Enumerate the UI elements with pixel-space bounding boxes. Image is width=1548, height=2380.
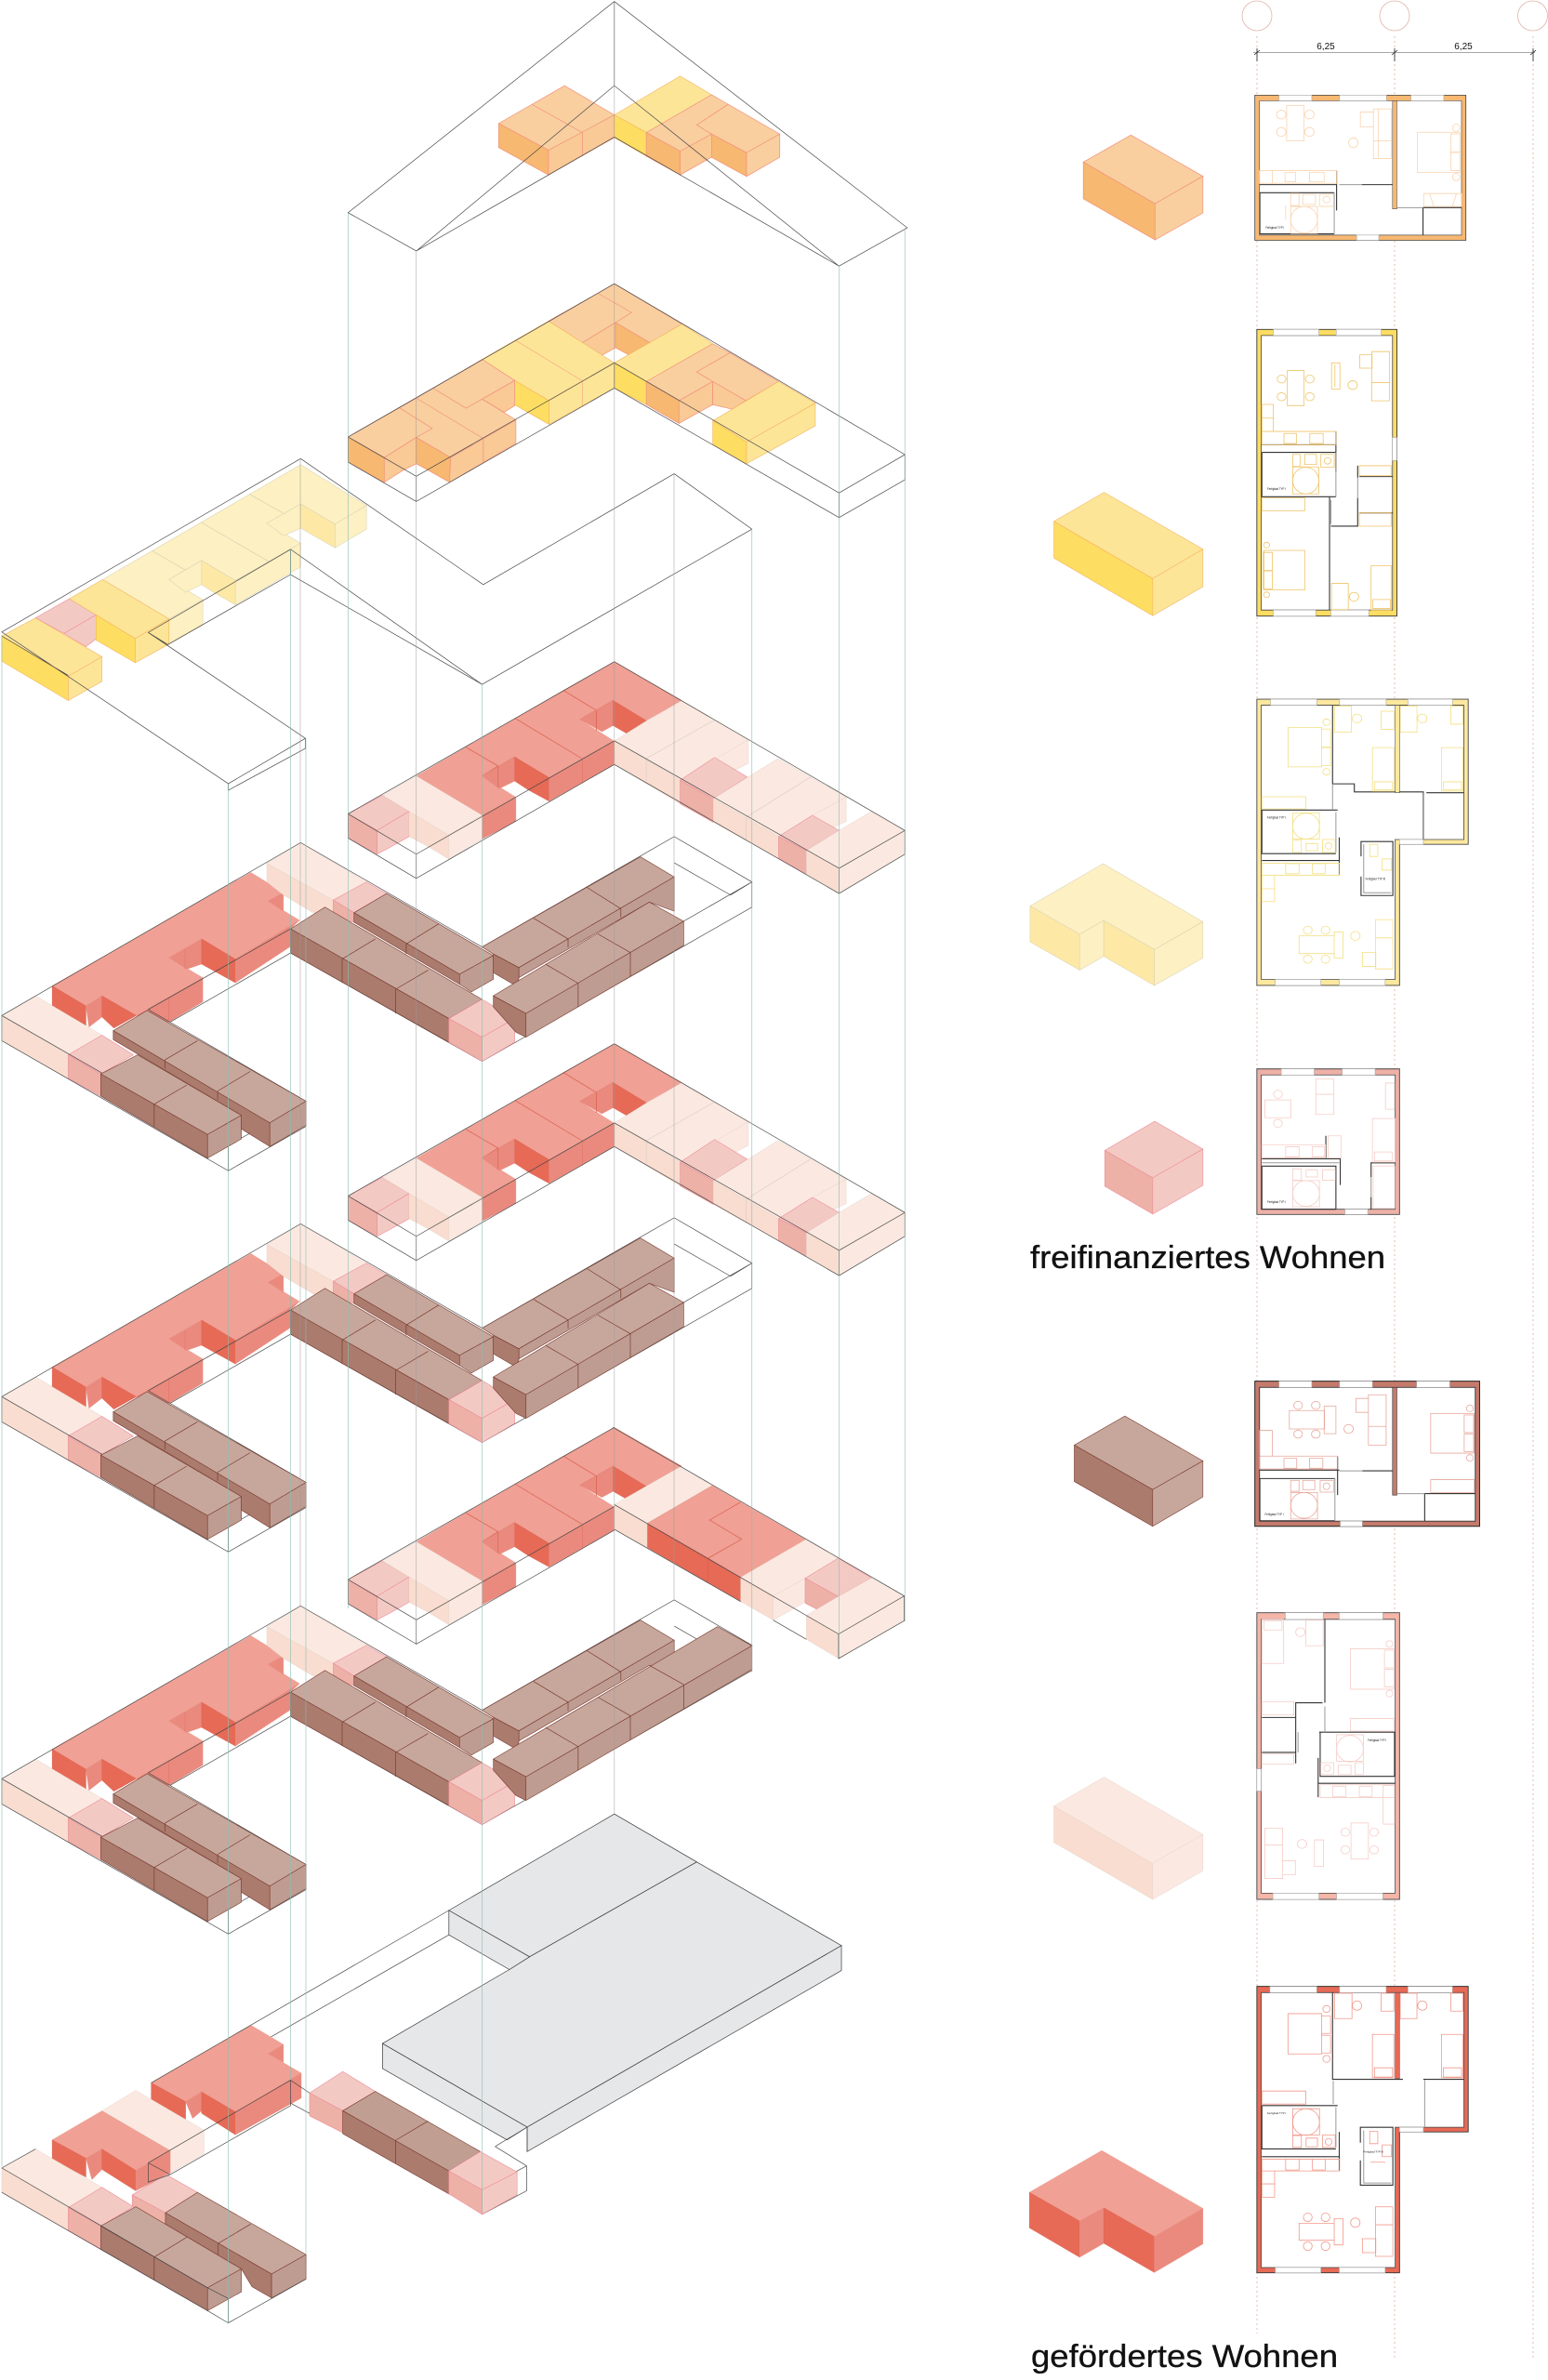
heading: freifinanziertes Wohnen: freifinanziertes Wohnen: [1030, 1240, 1385, 1276]
floor plan: red four-room unit: Fertigbad TYP I: [1267, 2111, 1286, 2115]
gable roof wireframe: [348, 2, 907, 266]
floor left wing, upper: [2, 837, 752, 1170]
dimension label right: 6,25: [1454, 42, 1473, 52]
floor plan: pink one-room unit: Fertigbad TYP I: [1267, 1200, 1286, 1204]
floor left wing, lower: [2, 1600, 752, 1934]
top gable roof wireframe and attic apartments: [2, 2, 907, 790]
legend block: yellow: [1054, 493, 1203, 615]
floor plan: brown two-room unit: Fertigbad TYP I: [1264, 1513, 1284, 1516]
floor plan: peach two-room unit: Fertigbad TYP I: [1265, 226, 1284, 230]
ground floor with grey podium: [2, 1814, 841, 2323]
floor plan: red four-room unit: [1257, 1987, 1468, 2273]
floor plan: pale rose three-room unit: [1257, 1613, 1399, 1899]
dimension label: 6,25: [1316, 42, 1335, 52]
left gable roof wireframe: [2, 458, 752, 790]
upper level slab wireframe: [348, 284, 905, 518]
floor left wing, middle: [2, 1218, 752, 1552]
floor plan: pale yellow four-room unit: Fertigbad TYP I: [1267, 815, 1286, 820]
floor plan: peach two-room unit: [1255, 95, 1466, 240]
ground floor wire outline: [2, 2025, 310, 2323]
floor right wing, upper: [348, 662, 905, 893]
legend block: pale rose: [1054, 1777, 1203, 1899]
legend block: pink: [1105, 1121, 1203, 1214]
floor right wing, lower: [348, 1427, 681, 1644]
legend block: red L: [1029, 2150, 1203, 2272]
upper apartments level: [348, 284, 815, 483]
left pale yellow wing: [2, 465, 366, 701]
floor plan: pale yellow four-room unit: Fertigbad TYP III: [1366, 877, 1385, 880]
legend block: brown: [1074, 1416, 1203, 1527]
floor plan: red four-room unit: Fertigbad TYP III: [1363, 2150, 1383, 2153]
floor plan: pale yellow four-room unit: [1257, 699, 1468, 985]
vertical construction lines: [2, 2, 905, 2323]
floor plan: pink one-room unit: [1257, 1069, 1399, 1214]
grid axes: circles, dotted lines, dimensions: [1242, 1, 1547, 2360]
heading: gefördertes Wohnen: gefördertes Wohnen: [1031, 2339, 1338, 2374]
floor plan: pale rose three-room unit: Fertigbad TYP I: [1368, 1739, 1386, 1742]
floor plan: yellow three-room unit: Fertigbad TYP I: [1267, 487, 1286, 491]
legend block: pale yellow L: [1030, 864, 1203, 985]
floor right wing, middle: [348, 1044, 905, 1276]
ground floor apartment blocks: [2, 2025, 517, 2310]
floor plan: brown two-room unit: [1255, 1382, 1479, 1527]
attic storey blocks: [498, 76, 780, 177]
grey garage slab: [251, 1814, 841, 2215]
floor right wing, lower with subsidised units: [613, 1427, 905, 1659]
floor plan: yellow three-room unit: [1257, 329, 1396, 616]
legend block: peach: [1083, 135, 1203, 240]
